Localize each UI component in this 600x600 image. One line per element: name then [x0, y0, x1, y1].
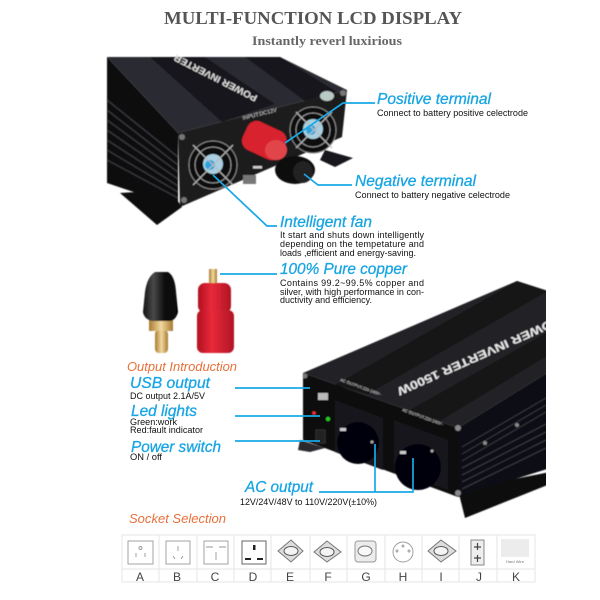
socket F	[314, 541, 341, 584]
socket K: K	[512, 570, 520, 584]
label: LED lights: Red:fault indicator	[130, 425, 203, 435]
product photo: inverter front with sockets: AC OUTPUT:220-240V~	[340, 377, 383, 397]
socket H	[393, 542, 413, 584]
label: power switch: Power switch	[131, 439, 221, 456]
label: intelligent fan: Intelligent fan	[280, 214, 372, 231]
socket B: B	[173, 570, 181, 584]
socket J: J	[476, 570, 482, 584]
leader line: LED lights	[235, 415, 320, 417]
socket D: D	[249, 570, 258, 584]
label: positive terminal	[377, 91, 528, 118]
label: negative terminal: Connect to battery negative celectrode	[355, 190, 510, 200]
title: MULTI-FUNCTION LCD DISPLAY	[164, 8, 462, 28]
leader lines: AC output	[319, 444, 413, 492]
socket E: E	[286, 570, 294, 584]
subtitle: Instantly reverl luxirious	[252, 34, 402, 48]
socket selection table	[122, 535, 535, 584]
socket G	[355, 541, 376, 584]
socket K: Hard Wire	[506, 559, 525, 564]
leader line: USB output	[235, 387, 310, 389]
label: negative terminal: Negative terminal	[355, 173, 476, 190]
socket F: F	[324, 570, 332, 584]
label: positive terminal: Connect to battery positive celectrode	[377, 108, 528, 118]
socket A: A	[136, 570, 144, 584]
socket E	[278, 540, 303, 584]
label: LED lights: Led lights	[131, 403, 197, 420]
product photo: inverter rear with terminals and fans: POWER INVERTER	[172, 51, 259, 103]
label: pure copper: Contains 99.2~99.5% copper and	[280, 278, 424, 288]
socket I: I	[439, 570, 443, 584]
label: intelligent fan: loads ,efficient and energy-saving.	[280, 248, 416, 258]
product photo: inverter rear with terminals and fans: INPUT:DC12V	[242, 108, 278, 122]
leader line: pure copper	[220, 273, 277, 275]
socket B	[166, 541, 190, 584]
product photo: inverter rear with terminals and fans	[107, 51, 353, 225]
label: pure copper: ductivity and efficiency.	[280, 295, 372, 305]
label: negative terminal	[355, 173, 510, 200]
socket K	[501, 539, 529, 584]
label: AC output	[240, 479, 377, 507]
label: USB output: DC output 2.1A/5V	[130, 391, 205, 401]
leader line: positive terminal	[285, 103, 375, 143]
heading: output introduction: Output Introduction	[127, 360, 237, 374]
socket C: C	[211, 570, 220, 584]
label: LED lights	[130, 403, 203, 435]
leader line: negative terminal	[304, 174, 352, 185]
socket D	[242, 541, 266, 584]
label: power switch: ON / off	[130, 452, 163, 462]
product photo: binding posts	[143, 269, 234, 353]
label: pure copper: silver, with high performance in con-	[280, 287, 424, 297]
leader line: power switch	[235, 440, 320, 442]
socket A	[128, 541, 153, 584]
label: intelligent fan	[280, 214, 424, 258]
label: LED lights: Green:work	[130, 417, 177, 427]
label: pure copper	[280, 261, 424, 305]
label: USB output: USB output	[130, 375, 211, 392]
product photo: inverter front with sockets: POWER INVERTER 1500W	[395, 313, 563, 397]
label: positive terminal: Positive terminal	[377, 91, 491, 108]
socket H: H	[399, 570, 407, 584]
heading: socket selection: Socket Selection	[129, 512, 226, 526]
label: USB output	[130, 375, 211, 401]
socket I	[428, 540, 456, 584]
product photo: inverter front with sockets	[298, 281, 563, 518]
socket J	[471, 540, 484, 584]
socket C	[204, 541, 228, 584]
product photo: inverter front with sockets: AC OUTPUT:220-240V~	[402, 407, 445, 427]
label: intelligent fan: depending on the tempetature and	[280, 239, 424, 249]
label: pure copper: 100% Pure copper	[280, 261, 408, 278]
label: AC output: 12V/24V/48V to 110V/220V(±10%)	[240, 497, 377, 507]
label: intelligent fan: It start and shuts down intelligently	[280, 230, 424, 240]
socket G: G	[361, 570, 371, 584]
leader line: intelligent fan	[213, 175, 277, 226]
label: AC output: AC output	[244, 479, 314, 496]
